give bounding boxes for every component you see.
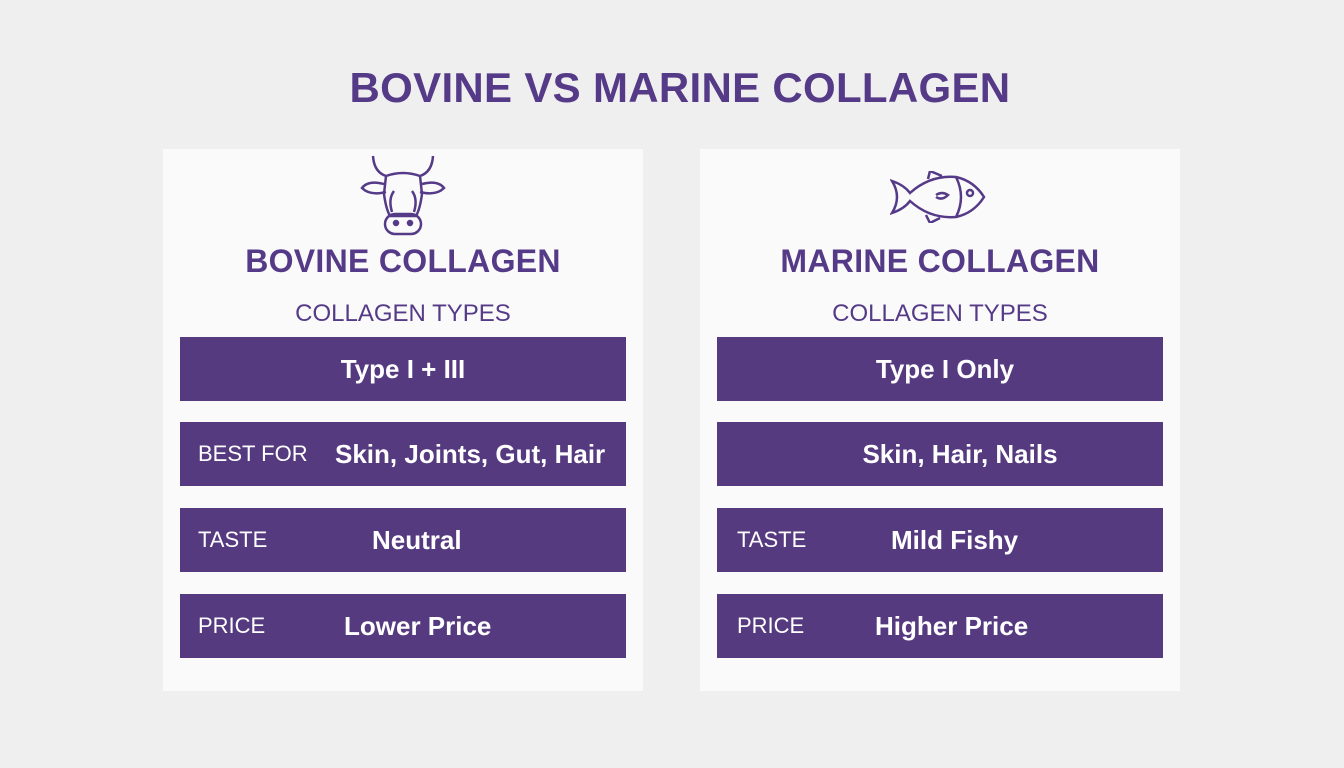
row: taste [717, 508, 1163, 572]
row: type: Type I + III [341, 354, 465, 384]
row: best for: Skin, Joints, Gut, Hair [335, 439, 605, 469]
row: taste [180, 508, 626, 572]
row: taste: Neutral [372, 525, 462, 555]
row: price: Higher Price [875, 611, 1028, 641]
row: type [717, 337, 1163, 401]
row: price [717, 594, 1163, 658]
row: taste: TASTE [198, 527, 267, 552]
subheading: COLLAGEN TYPES [832, 300, 1048, 327]
row: best for: Skin, Hair, Nails [862, 439, 1058, 469]
row: type [180, 337, 626, 401]
icon: cow [360, 156, 446, 236]
row: price: PRICE [737, 613, 804, 638]
panel: marine [700, 149, 1180, 691]
row: price [180, 594, 626, 658]
row: type: Type I Only [876, 354, 1014, 384]
panel: bovine [163, 149, 643, 691]
row: taste: Mild Fishy [891, 525, 1018, 555]
row: price: PRICE [198, 613, 265, 638]
row: price: Lower Price [344, 611, 491, 641]
heading: BOVINE COLLAGEN [245, 243, 561, 279]
heading: MARINE COLLAGEN [780, 243, 1100, 279]
row: best for: BEST FOR [198, 441, 308, 466]
row: best for [180, 422, 626, 486]
icon: fish [890, 171, 986, 223]
row: taste: TASTE [737, 527, 806, 552]
subheading: COLLAGEN TYPES [295, 300, 511, 327]
row: best for [717, 422, 1163, 486]
title: BOVINE VS MARINE COLLAGEN [350, 64, 1010, 111]
